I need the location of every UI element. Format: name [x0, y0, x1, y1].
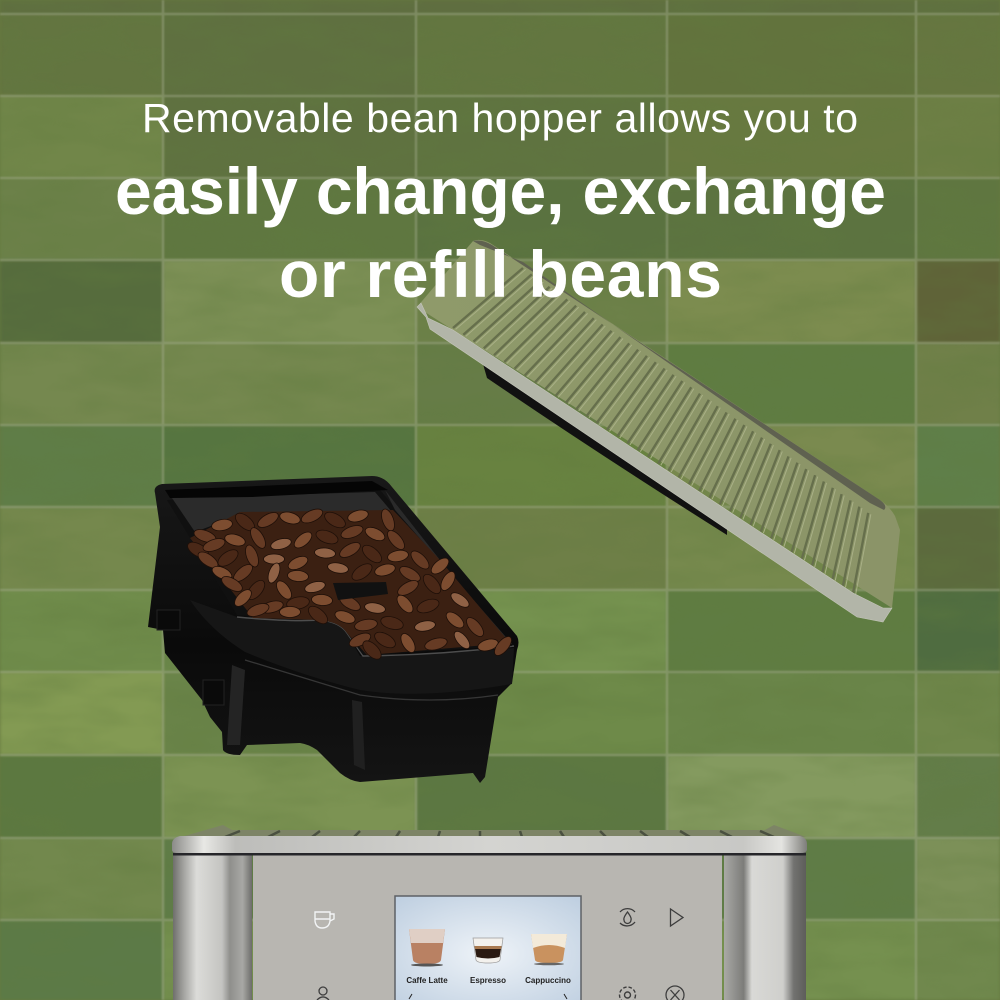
touch screen: [395, 896, 581, 1000]
hopper mount clips: [157, 610, 224, 705]
drink: espresso: [473, 938, 503, 963]
bean hopper lid: [417, 240, 900, 622]
hopper rim band: [190, 600, 514, 694]
drink labels: Caffe Latte: [406, 976, 448, 985]
lid ribs: [453, 268, 871, 594]
hopper body: [148, 476, 518, 783]
hopper centre tab: [333, 582, 388, 600]
carousel arrows: [409, 994, 567, 999]
silver top band: [172, 836, 807, 853]
icon: descale cycle: [620, 909, 635, 926]
icon: cancel: [666, 986, 684, 1000]
touch screen: Cappuccino: [525, 976, 571, 985]
icon: settings gear: [620, 987, 636, 1000]
left steel panel: [173, 852, 252, 1000]
icon: profile: [317, 987, 329, 1000]
lid underside shadow: [483, 364, 727, 535]
heading bold line 2: or refill beans: [279, 237, 722, 311]
bean hopper: [148, 476, 518, 783]
touch screen: Espresso: [470, 976, 506, 985]
control panel: [253, 855, 722, 1000]
right steel panel: [724, 852, 806, 1000]
right wall sheen: [385, 490, 512, 645]
icon: play: [670, 909, 683, 926]
heading bold line 1: easily change, exchange: [115, 154, 886, 228]
heading intro line: Removable bean hopper allows you to: [142, 95, 858, 141]
icon: cup: [315, 912, 334, 928]
front wall reflections: [227, 665, 245, 745]
back wall sheen: [172, 492, 392, 532]
coffee machine: [172, 825, 807, 1000]
machine top tray: [181, 825, 806, 837]
lid dark back wall: [473, 240, 885, 510]
lid silver front edge: [417, 303, 892, 622]
lid tray: [417, 240, 900, 608]
heading: [115, 95, 886, 311]
hopper interior: [167, 490, 512, 655]
coffee beans: [185, 506, 515, 662]
drink: caffe latte: [409, 929, 445, 966]
drink: cappuccino: [531, 934, 567, 965]
